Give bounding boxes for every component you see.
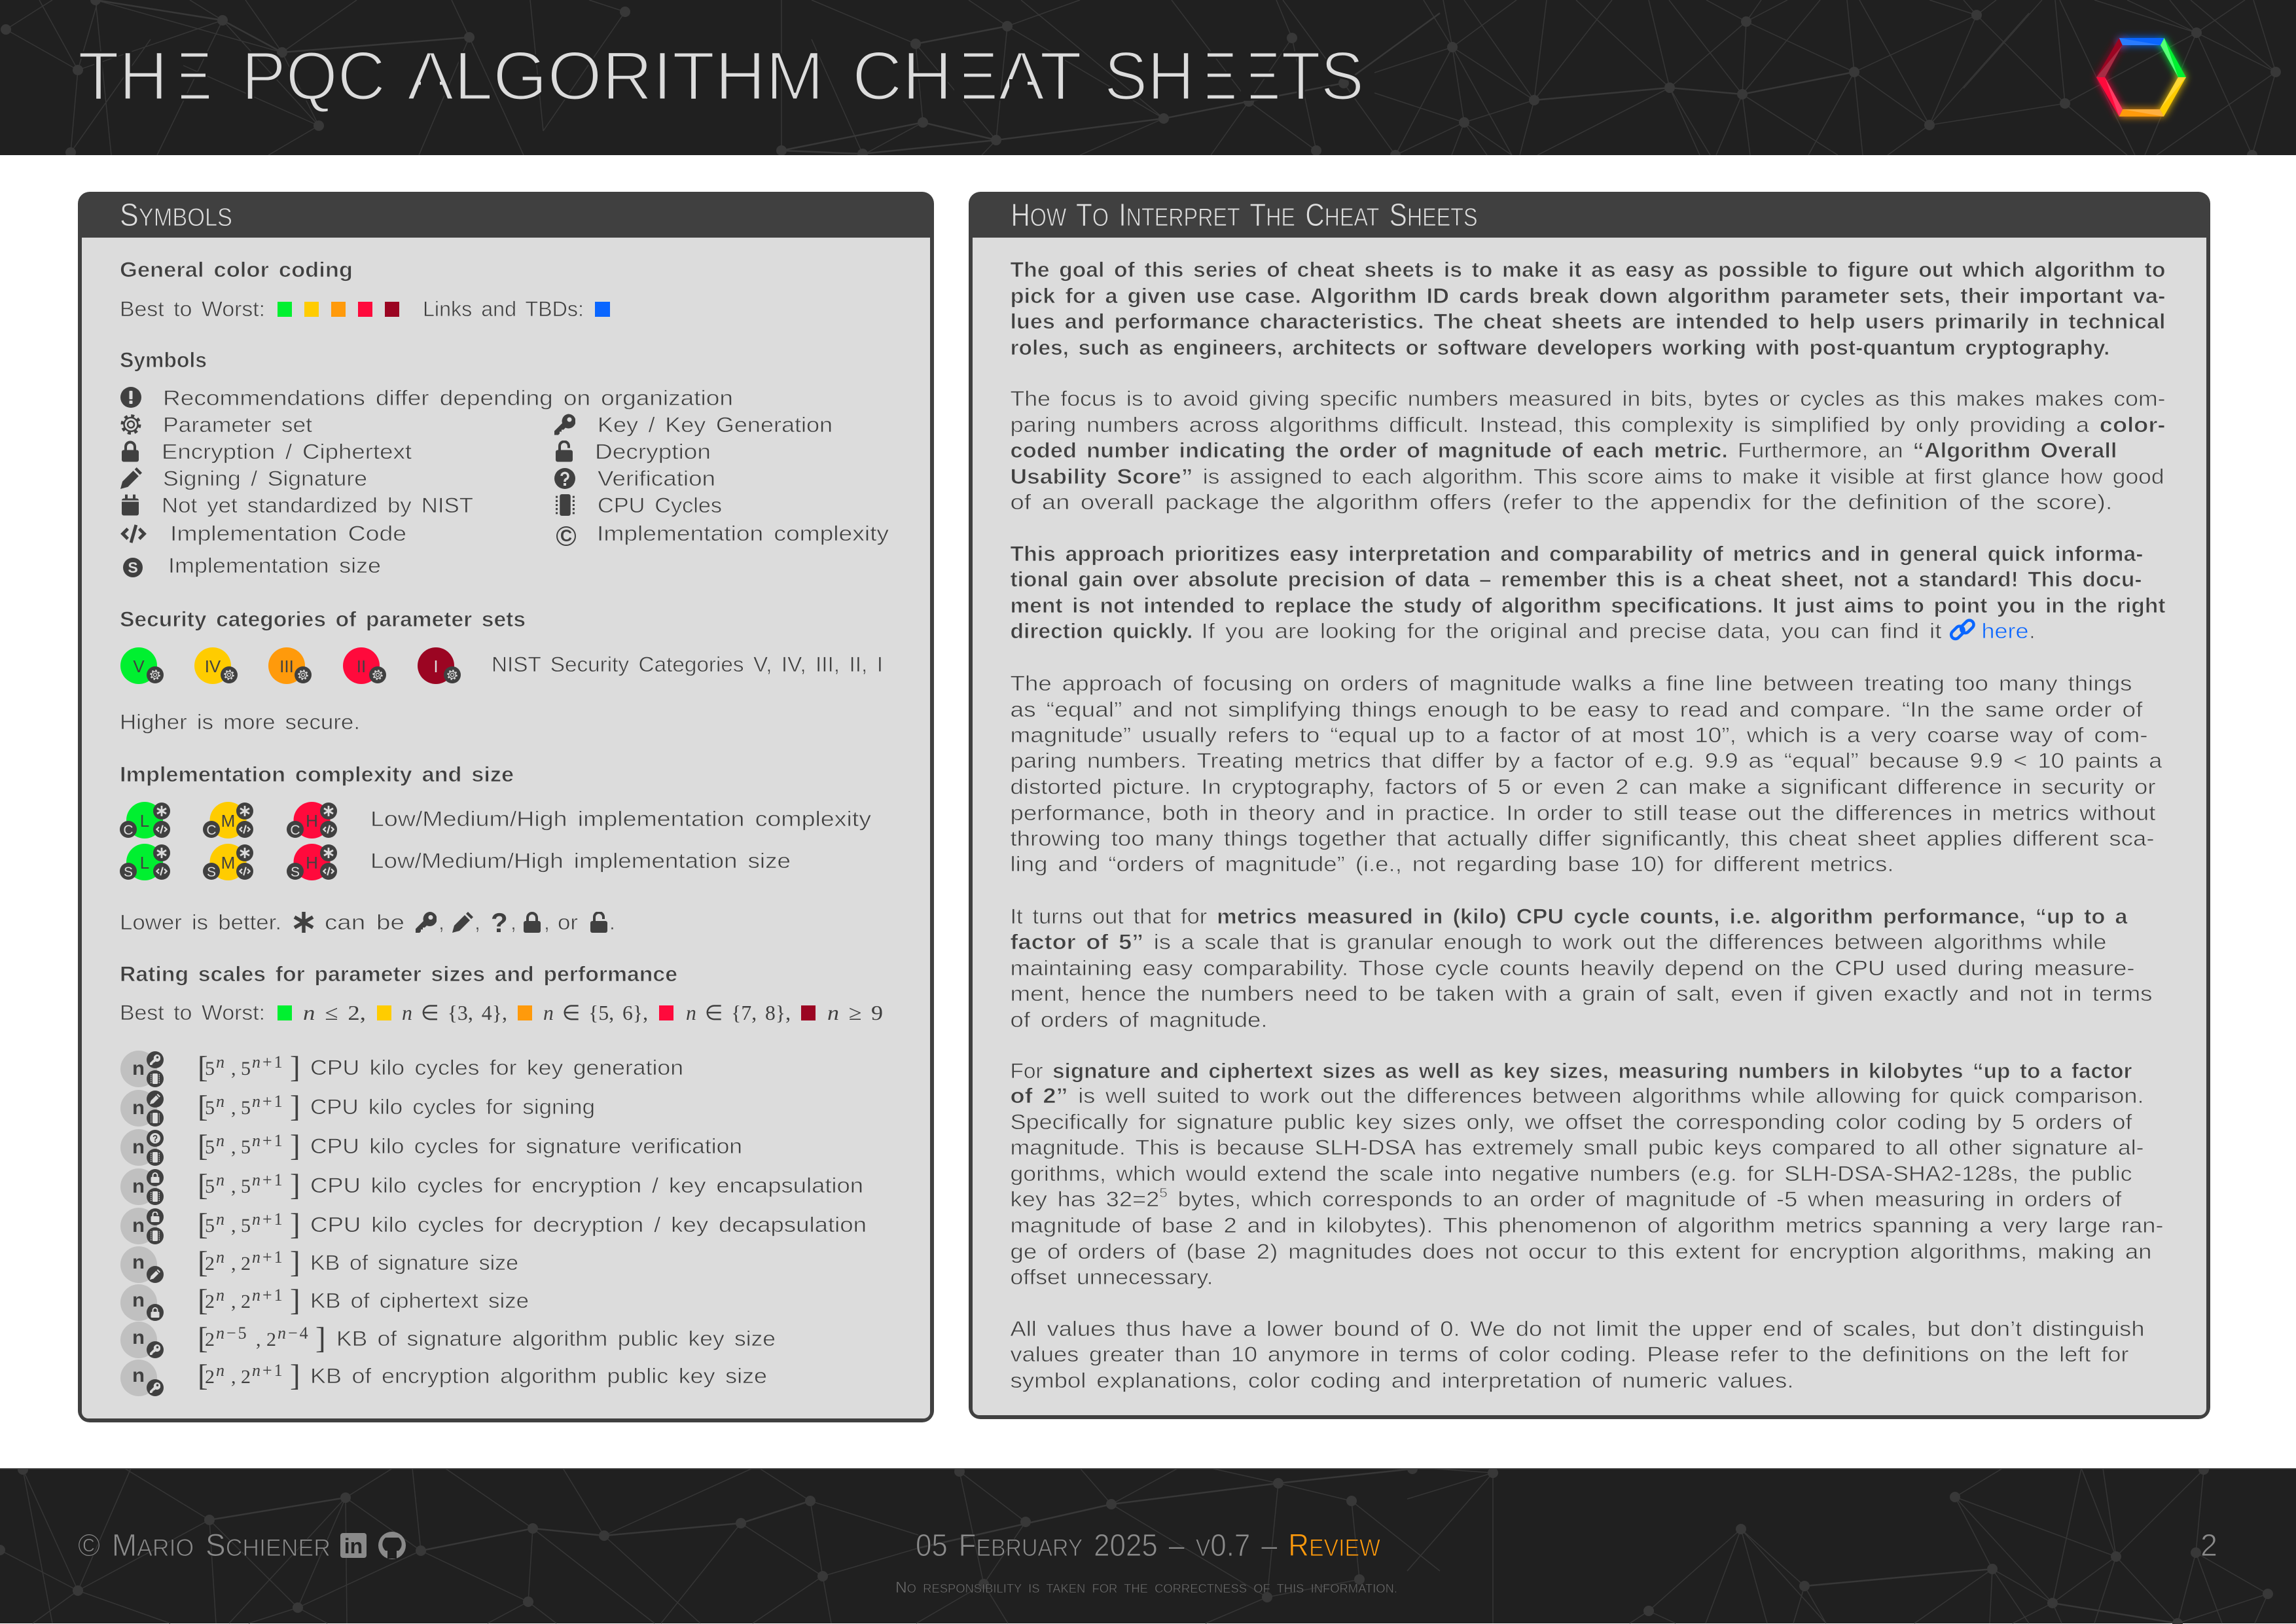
paragraph: orders of magnitude: The approach of focusing on orders of magnitude walks a fine line between treating too many things [1011, 672, 2132, 695]
paragraph: approach: tional gain over absolute precision of data – remember this is a cheat sheet, not a standard! This docu- [1011, 568, 2142, 591]
section: implementation complexity and size: Low/Medium/High implementation size [370, 849, 791, 873]
paragraph: approach: . [2029, 619, 2035, 643]
lower is better note: , [475, 911, 480, 934]
rating row: signature public key size: n [132, 1327, 145, 1348]
section: symbols list: Not yet standardized by NIST [162, 494, 473, 517]
paragraph: sizes: 5 [1159, 1186, 1168, 1200]
title: PQC [242, 38, 386, 115]
paragraph: orders of magnitude [1011, 672, 2162, 876]
rating row: encryption cycles: [ [198, 1168, 208, 1202]
section: symbols list: Verification [598, 467, 715, 490]
rating row: key generation cycles: 5 [205, 1058, 215, 1079]
rating row: encryption public key size: [ [198, 1359, 208, 1393]
badge: category V: V [133, 657, 145, 676]
lower is better note: Lower is better. [120, 911, 281, 934]
paragraph: sizes: offset unnecessary. [1011, 1265, 1213, 1289]
paragraph: bounds: symbol explanations, color coding and interpretation of numeric values. [1011, 1369, 1793, 1392]
footer date and version: 05 FEBRUARY 2025 – V0.7 – REVIEW [916, 1528, 1380, 1563]
rating row: signature size: KB of signature size [310, 1251, 518, 1274]
badge: category IV [194, 647, 238, 684]
section: security categories: Higher is more secure. [120, 710, 360, 734]
footer network pattern [0, 1464, 2273, 1624]
badge: low size [120, 844, 170, 880]
footer disclaimer: NO RESPONSIBILITY IS TAKEN FOR THE CORRECTNESS OF THIS INFORMATION. [895, 1579, 1397, 1597]
rating row: signature size: ] [290, 1246, 300, 1280]
section: rating scales [120, 962, 883, 1396]
rating row: signature size: n+1 [252, 1248, 285, 1267]
rating row: encryption public key size: n+1 [252, 1361, 285, 1380]
rating row: signing cycles: n+1 [252, 1092, 285, 1111]
rating row: decryption cycles: 5 [241, 1215, 251, 1236]
section: rating scales: n ∈ {7, 8}, [686, 1001, 791, 1024]
rating row: encryption cycles: ] [290, 1168, 300, 1202]
rating row: encryption cycles: n [132, 1176, 145, 1197]
paragraph: orders of magnitude: paring numbers. Treating metrics that differ by a factor of e.g. 9.9 as “equal” because 9.9 < 10 paints a [1011, 749, 2162, 772]
section: symbols list: C [560, 527, 572, 545]
paragraph: orders of magnitude: throwing too many things together that actually differ significantly, this cheat sheet applies different sca- [1011, 827, 2155, 850]
title [78, 38, 1364, 115]
badge: category I [418, 647, 461, 684]
paragraph: orders of magnitude: distorted picture. In cryptography, factors of 5 or even 2 can make a significant difference in security or [1011, 775, 2156, 799]
footer author: © MARIO SCHIENER [78, 1528, 331, 1563]
paragraph: focus: of an overall package the algorithm offers (refer to the appendix for the definition of the score). [1011, 490, 2113, 514]
rating row: encryption cycles: CPU kilo cycles for encryption / key encapsulation [310, 1174, 863, 1197]
rating row: signing cycles: , [231, 1097, 236, 1119]
section: implementation complexity and size: Implementation complexity and size [120, 763, 514, 786]
rating row: encryption cycles: n+1 [252, 1170, 285, 1189]
title: CHEAT [852, 38, 1082, 115]
rating row: signature public key size: ] [315, 1322, 326, 1356]
rating row: signing cycles: n [216, 1092, 226, 1111]
badge: high size [287, 844, 337, 880]
paragraph: sizes: ge of orders of (base 2) magnitudes does not occur to this extent for encryption algorithms, making an [1011, 1240, 2152, 1263]
rating row: encryption public key size: 2 [205, 1366, 215, 1388]
paragraph: sizes [1011, 1059, 2164, 1289]
rating row: signature size [120, 1246, 518, 1283]
rating row: key generation cycles: CPU kilo cycles for key generation [310, 1056, 683, 1079]
paragraph: bounds: All values thus have a lower bound of 0. We do not limit the upper end of scales, but don’t distinguish [1011, 1317, 2144, 1341]
rating row: decryption cycles: n+1 [252, 1210, 285, 1229]
paragraph: cycle counts: maintaining easy comparability. Those cycle counts heavily depend on the CPU used during measure- [1011, 956, 2135, 980]
section: rating scales: n ∈ {3, 4}, [402, 1001, 507, 1024]
section: symbols list [120, 348, 889, 577]
badge: medium size: S [207, 865, 216, 880]
rating row: verification cycles: n [132, 1136, 145, 1158]
rating row: signing cycles: 5 [241, 1097, 251, 1119]
rating row: key generation cycles: 5 [241, 1058, 251, 1079]
section: symbols list: S [128, 559, 138, 576]
section: symbols list: Encryption / Ciphertext [162, 440, 412, 463]
rating row: decryption cycles: 5 [205, 1215, 215, 1236]
section: symbols list: Key / Key Generation [598, 413, 833, 437]
paragraph: cycle counts: It turns out that for metrics measured in (kilo) CPU cycle counts, i.e. algorithm performance, “up to a [1011, 905, 2128, 928]
badge: low complexity: C [123, 823, 134, 838]
paragraph: cycle counts: of orders of magnitude. [1011, 1008, 1267, 1032]
paragraph: goal: lues and performance characteristics. The cheat sheets are intended to help users primarily in technical [1011, 310, 2165, 333]
rating row: key generation cycles [120, 1051, 683, 1087]
paragraph: approach: direction quickly. [1011, 619, 1193, 643]
icon: linkedin: in [344, 1534, 363, 1558]
rating row: ciphertext size: n+1 [252, 1286, 285, 1305]
section: security categories: Security categories of parameter sets [120, 607, 526, 631]
rating row: encryption cycles: n [216, 1170, 226, 1189]
section: general color coding: Links and TBDs: [423, 297, 584, 321]
paragraph: goal: The goal of this series of cheat sheets is to make it as easy as possible to figure out which algorithm to [1011, 258, 2165, 281]
rating row: encryption public key size: 2 [241, 1366, 251, 1388]
paragraph: approach: here [1982, 619, 2029, 643]
icon: link [1949, 619, 1975, 641]
lower is better note: , [511, 911, 516, 934]
rating row: verification cycles: n+1 [252, 1131, 285, 1150]
page number: 2 [2200, 1528, 2217, 1563]
rating row: decryption cycles: n [132, 1215, 145, 1236]
rating row: encryption cycles [120, 1168, 863, 1205]
badge: high size: H [306, 853, 318, 873]
rating row: signing cycles: n [132, 1097, 145, 1119]
section: implementation complexity and size: Low/Medium/High implementation complexity [370, 807, 871, 831]
paragraph: approach: This approach prioritizes easy interpretation and comparability of metrics and in general quick informa- [1011, 542, 2143, 566]
rating row: signing cycles: 5 [205, 1097, 215, 1119]
rating row: encryption public key size: n [216, 1361, 226, 1380]
lower is better note [120, 907, 615, 938]
rating row: ciphertext size: [ [198, 1284, 208, 1318]
rating row: signing cycles: [ [198, 1090, 208, 1124]
rating row: verification cycles: , [231, 1136, 236, 1158]
rating row: verification cycles [120, 1129, 742, 1166]
rating row: verification cycles: ] [290, 1129, 300, 1163]
paragraph: goal: pick for a given use case. Algorithm ID cards break down algorithm parameter sets, their important va- [1011, 284, 2165, 308]
section: security categories [120, 607, 883, 734]
rating row: key generation cycles: n [132, 1058, 145, 1079]
section: symbols list: CPU Cycles [598, 494, 722, 517]
paragraph: sizes: magnitude of base 2 and in kilobytes). This phenomenon of algorithm metrics spanning a very large ran- [1011, 1214, 2164, 1237]
badge: category III: III [279, 657, 294, 676]
icon: github [378, 1532, 406, 1559]
rating row: signature public key size: n−5 [216, 1324, 249, 1343]
section: rating scales: n ≥ 9 [827, 1001, 883, 1024]
lower is better note: or [558, 911, 578, 934]
paragraph: sizes: gorithms, which would extend the scale into negative numbers (e.g. for SLH-DSA-SHA2-128s, the public [1011, 1162, 2132, 1185]
rating row: signature public key size: [ [198, 1322, 208, 1356]
section: symbols list: Parameter set [163, 413, 312, 437]
paragraph: orders of magnitude: ling and “orders of magnitude” (i.e., not regarding base 10) for different metrics. [1011, 852, 1894, 876]
rating row: signature size: [ [198, 1246, 208, 1280]
rating row: decryption cycles: ] [290, 1208, 300, 1242]
lower is better note: , [544, 911, 550, 934]
section: symbols list: Implementation Code [170, 522, 406, 545]
paragraph: focus: Usability Score” is assigned to each algorithm. This score aims to make it visible at first glance how good [1011, 465, 2164, 488]
header network pattern [1, 0, 2281, 160]
section: symbols list: Implementation complexity [597, 522, 889, 545]
paragraph: bounds [1011, 1317, 2144, 1392]
rating row: signature size: , [231, 1253, 236, 1274]
icon: linkedin [340, 1533, 367, 1558]
rating row: verification cycles: n [216, 1131, 226, 1150]
rating row: verification cycles: 5 [241, 1136, 251, 1158]
rating row: encryption cycles: 5 [241, 1176, 251, 1197]
panel: symbols [78, 192, 934, 1422]
rating row: ciphertext size: 2 [241, 1291, 251, 1312]
section: security categories: NIST Security Categories V, IV, III, II, I [492, 653, 883, 676]
badge: low size: S [124, 865, 133, 880]
rating row: signature public key size: 2 [266, 1329, 276, 1350]
rating row: signature public key size: , [256, 1329, 260, 1350]
badge: category V [120, 647, 164, 684]
paragraph: goal [1011, 258, 2165, 359]
section: general color coding: Best to Worst: [120, 297, 265, 321]
paragraph: sizes: bytes, which corresponds to an order of magnitude of -5 when measuring in orders of [1168, 1187, 2122, 1211]
panel heading: how to interpret: HOW TO INTERPRET THE CHEAT SHEETS [1011, 198, 1478, 233]
badge: high complexity: H [306, 811, 318, 831]
section: rating scales: Best to Worst: [120, 1001, 265, 1024]
section: symbols list: Symbols [120, 348, 207, 372]
badge: medium complexity [203, 802, 253, 839]
rating row: encryption public key size: KB of encryption algorithm public key size [310, 1364, 767, 1388]
paragraph: focus: coded number indicating the order of magnitude of each metric. Furthermore, an “Algorithm Overall [1011, 439, 2117, 462]
rating row: ciphertext size [120, 1284, 529, 1321]
rating row: ciphertext size: ] [290, 1284, 300, 1318]
rating row: signature size: 2 [241, 1253, 251, 1274]
title: THE [78, 38, 213, 115]
badge: medium size [203, 844, 253, 880]
footer bar [0, 1464, 2296, 1624]
rating row: encryption cycles: , [231, 1176, 236, 1197]
paragraph: orders of magnitude: as “equal” and not simplifying things enough to be easy to read and compare. “In the same order of [1011, 698, 2143, 721]
paragraph: approach: ment is not intended to replace the study of algorithm specifications. It just aims to point you in the right [1011, 594, 2166, 617]
section: symbols list: Recommendations differ depending on organization [163, 386, 733, 410]
rating row: signature size: 2 [205, 1253, 215, 1274]
rating row: ciphertext size: 2 [205, 1291, 215, 1312]
badge: medium complexity: M [221, 811, 235, 831]
paragraph: approach: If you are looking for the original and precise data, you can find it [1202, 619, 1942, 643]
rating row: signature public key size: 2 [205, 1329, 215, 1350]
section: implementation complexity and size [120, 763, 871, 938]
rating row: decryption cycles [120, 1208, 867, 1244]
section: symbols list: Decryption [595, 440, 711, 463]
paragraph: approach [1011, 542, 2166, 643]
lower is better note: can be [325, 911, 404, 934]
badge: high complexity: C [290, 823, 300, 838]
badge: category II [343, 647, 386, 684]
logo: hexagon [2096, 38, 2186, 117]
rating row: ciphertext size: n [132, 1290, 145, 1311]
paragraph: focus: paring numbers across algorithms difficult. Instead, this complexity is simplified by only providing a color- [1011, 413, 2165, 437]
paragraph: focus: The focus is to avoid giving specific numbers measured in bits, bytes or cycles as this makes makes com- [1011, 387, 2165, 410]
paragraph: cycle counts: ment, hence the numbers need to be taken with a grain of salt, even if given exactly and not in terms [1011, 982, 2152, 1005]
title: SHEETS [1104, 38, 1364, 115]
rating row: signature public key size: n−4 [278, 1324, 310, 1343]
paragraph: sizes: magnitude. This is because SLH-DSA has extremely small pubic keys compared to all other signature al- [1011, 1136, 2144, 1159]
badge: medium complexity: C [206, 823, 217, 838]
rating row: ciphertext size: , [231, 1291, 236, 1312]
rating row: verification cycles: [ [198, 1129, 208, 1163]
paragraph: bounds: values greater than 10 anymore in terms of color coding. Please refer to the definitions on the left for [1011, 1343, 2129, 1366]
section: general color coding [120, 258, 610, 321]
badge: high complexity [287, 802, 337, 839]
badge: low size: L [140, 853, 149, 873]
rating row: encryption public key size: ] [290, 1359, 300, 1393]
rating row: key generation cycles: , [231, 1058, 236, 1079]
rating row: key generation cycles: [ [198, 1051, 208, 1085]
panel: how to interpret the cheat sheets [969, 192, 2210, 1419]
title: ALGORITHM [407, 38, 824, 115]
paragraph: cycle counts [1011, 905, 2152, 1032]
badge: medium size: M [221, 853, 235, 873]
badge: category IV: IV [205, 657, 221, 676]
paragraph: orders of magnitude: magnitude” usually refers to “equal up to a factor of at most 10”, which is a very coarse way of com- [1011, 723, 2148, 747]
lower is better note: , [439, 911, 444, 934]
lower is better note: . [609, 911, 615, 934]
rating row: encryption public key size: , [231, 1366, 236, 1388]
paragraph: sizes: key has 32=2 [1011, 1187, 1142, 1211]
paragraph: sizes: For signature and ciphertext sizes as well as key sizes, measuring numbers in kilobytes “up to a factor [1011, 1059, 2132, 1083]
paragraph: goal: roles, such as engineers, architects or software developers working with post-quantum cryptography. [1011, 336, 2110, 359]
badge: category III [268, 647, 312, 684]
paragraph: orders of magnitude: performance, both in theory and in practice. In order to still tease out the differences in metrics without [1011, 801, 2156, 825]
paragraph: cycle counts: factor of 5” is a scale that is granular enough to work out the differences between algorithms while [1011, 930, 2106, 954]
rating row: verification cycles: 5 [205, 1136, 215, 1158]
section: symbols list: Implementation size [168, 554, 381, 577]
rating row: signing cycles: ] [290, 1090, 300, 1124]
rating row: decryption cycles: CPU kilo cycles for decryption / key decapsulation [310, 1213, 867, 1236]
paragraph: sizes: Specifically for signature public key sizes only, we offset the corresponding color coding by 5 orders of [1011, 1110, 2132, 1134]
rating row: key generation cycles: ] [290, 1051, 300, 1085]
badge: category I: I [433, 657, 439, 676]
section: rating scales: n ∈ {5, 6}, [543, 1001, 648, 1024]
section: rating scales: Rating scales for parameter sizes and performance [120, 962, 677, 986]
header bar [0, 0, 2296, 160]
rating row: key generation cycles: n [216, 1053, 226, 1072]
lower is better note: ? [491, 907, 508, 938]
section: rating scales: n ≤ 2, [303, 1001, 366, 1024]
rating row: decryption cycles: n [216, 1210, 226, 1229]
rating row: decryption cycles: , [231, 1215, 236, 1236]
paragraph: sizes: of 2” is well suited to work out the differences between algorithms while allowing for quick comparison. [1011, 1084, 2144, 1108]
rating row: signature size: n [132, 1252, 145, 1273]
rating row: decryption cycles: [ [198, 1208, 208, 1242]
rating row: encryption public key size [120, 1359, 767, 1396]
rating row: signing cycles: CPU kilo cycles for signing [310, 1095, 595, 1119]
badge: category II: II [357, 657, 366, 676]
rating row: verification cycles: CPU kilo cycles for signature verification [310, 1134, 742, 1158]
badge: low complexity [120, 802, 170, 839]
rating row: signing cycles [120, 1090, 595, 1127]
rating row: signature public key size [120, 1322, 776, 1358]
rating row: encryption cycles: 5 [205, 1176, 215, 1197]
rating row: ciphertext size: KB of ciphertext size [310, 1289, 529, 1312]
section: symbols list: Signing / Signature [163, 467, 367, 490]
rating row: ciphertext size: n [216, 1286, 226, 1305]
section: general color coding: General color coding [120, 258, 353, 281]
panel heading: symbols: SYMBOLS [120, 198, 232, 233]
rating row: encryption public key size: n [132, 1365, 145, 1386]
rating row: key generation cycles: n+1 [252, 1053, 285, 1072]
badge: low complexity: L [140, 811, 149, 831]
paragraph: focus [1011, 387, 2165, 514]
rating row: signature public key size: KB of signature algorithm public key size [336, 1327, 776, 1350]
rating row: signature size: n [216, 1248, 226, 1267]
badge: high size: S [291, 865, 300, 880]
